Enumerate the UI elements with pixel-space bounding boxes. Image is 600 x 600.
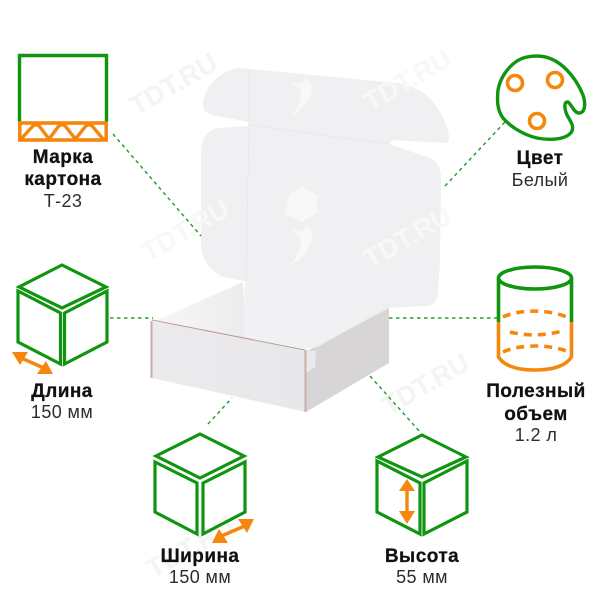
label: cardboard grade: Марка [33, 147, 93, 168]
label: usable volume: объем [504, 404, 568, 425]
label: colour: Цвет [517, 148, 563, 169]
label: usable volume: 1.2 л [515, 425, 557, 445]
watermarks: TDT.RU [376, 347, 475, 421]
box inner floor [243, 281, 385, 349]
product photo: open white box [136, 43, 457, 412]
icon: cube height [377, 435, 467, 534]
label: usable volume: Полезный [486, 381, 586, 402]
watermark on photo [136, 43, 457, 274]
watermarks: TDT.RU [124, 47, 223, 121]
arrow: length [12, 352, 53, 374]
watermarks: TDT.RU [136, 193, 235, 267]
watermarks [124, 43, 475, 584]
label: length [31, 381, 93, 422]
label: length: Длина [31, 381, 93, 402]
label: width: 150 мм [169, 567, 231, 587]
icon: cylinder volume [498, 267, 572, 370]
box inner back-left wall [155, 282, 246, 338]
icon: cardboard grade [20, 56, 106, 140]
icon: cube length [12, 265, 107, 374]
label: usable volume [486, 381, 586, 445]
watermark on photo: TDT.RU [358, 200, 457, 274]
box corner bevel [306, 351, 316, 373]
box front face [152, 321, 306, 412]
lid fold lines [246, 70, 389, 281]
label: height [385, 546, 459, 587]
label: colour: Белый [512, 170, 568, 190]
label: cardboard grade: Т-23 [44, 191, 82, 211]
box corner edge [152, 321, 306, 412]
label: length: 150 мм [31, 402, 93, 422]
label: height: 55 мм [396, 567, 448, 587]
label: width [161, 546, 239, 587]
watermarks: TDT.RU [358, 43, 457, 117]
leader lines [110, 122, 505, 433]
label: width: Ширина [161, 546, 239, 567]
watermarks: TDT.RU [141, 510, 240, 584]
label: colour [512, 148, 568, 190]
watermark on photo: TDT.RU [136, 193, 235, 267]
label: cardboard grade [24, 147, 102, 211]
watermarks: TDT.RU [358, 200, 457, 274]
box lid [201, 68, 449, 350]
label: height: Высота [385, 546, 459, 567]
icon: colour palette [498, 56, 585, 139]
label: cardboard grade: картона [24, 169, 102, 190]
box rim [316, 306, 389, 347]
box edge top [152, 320, 305, 350]
watermark on photo: TDT.RU [358, 43, 457, 117]
arrow: width [212, 519, 254, 543]
icon: cube width [155, 434, 254, 543]
arrow: height [399, 479, 415, 524]
box right face [306, 308, 389, 412]
